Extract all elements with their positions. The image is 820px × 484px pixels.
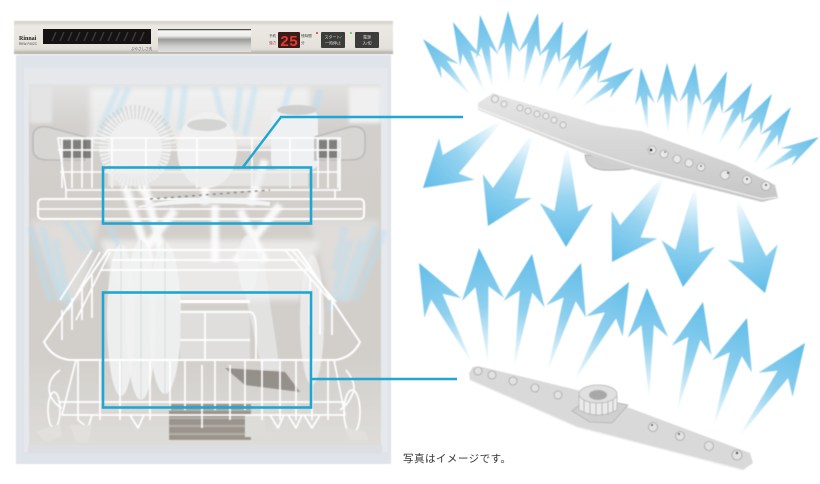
upper rack	[33, 127, 365, 219]
power button	[350, 32, 379, 48]
vent	[43, 29, 151, 44]
lower spray arm	[469, 367, 753, 470]
callout: lower nozzle highlight	[103, 292, 457, 408]
arrows: upper arm right upward spray	[631, 62, 820, 182]
model number: RKW-F402C	[19, 42, 38, 46]
filter basin	[169, 404, 251, 440]
cycle labels: 予約	[269, 33, 277, 38]
hub base	[572, 397, 628, 423]
lower rack	[44, 250, 360, 434]
dishwasher	[14, 21, 393, 464]
caption: 写真はイメージです。	[403, 452, 511, 465]
tub interior	[24, 68, 388, 453]
arm nozzles	[474, 367, 742, 460]
water spray streaks	[30, 86, 385, 310]
upper spray arm	[478, 93, 778, 202]
start button: 一時停止	[325, 40, 341, 46]
arm nozzles	[492, 96, 770, 190]
arm body	[478, 93, 778, 202]
arrows: upper arm downward spray	[405, 101, 790, 301]
start button	[316, 32, 345, 48]
cycle labels: 強力	[269, 40, 277, 45]
cycle labels: 分	[301, 40, 305, 45]
vent label: ぷやさしさ洗	[131, 46, 152, 51]
callout: upper nozzle highlight	[103, 117, 463, 224]
arrows: upper arm left upward spray	[414, 11, 640, 116]
door frame	[16, 55, 391, 464]
arrows: lower arm upward spray	[401, 246, 820, 450]
arm hub	[585, 155, 635, 170]
cycle labels: 残時間	[301, 33, 312, 38]
cycle labels	[269, 33, 312, 45]
plates: lower rack	[107, 235, 324, 400]
rack wheels and runners	[36, 424, 368, 442]
digital display: 25	[280, 34, 298, 51]
start button: スタート/	[324, 34, 342, 40]
upper spray arm in tub	[108, 170, 308, 208]
control panel	[14, 21, 393, 54]
hub	[579, 385, 617, 416]
power button: 入/切	[362, 40, 372, 46]
arm body	[469, 367, 753, 470]
brand logo: Rinnai	[19, 36, 37, 42]
water spray haze	[30, 88, 380, 300]
door handle	[158, 29, 251, 52]
power button: 電源	[363, 34, 371, 40]
dishes: upper rack	[99, 105, 318, 188]
